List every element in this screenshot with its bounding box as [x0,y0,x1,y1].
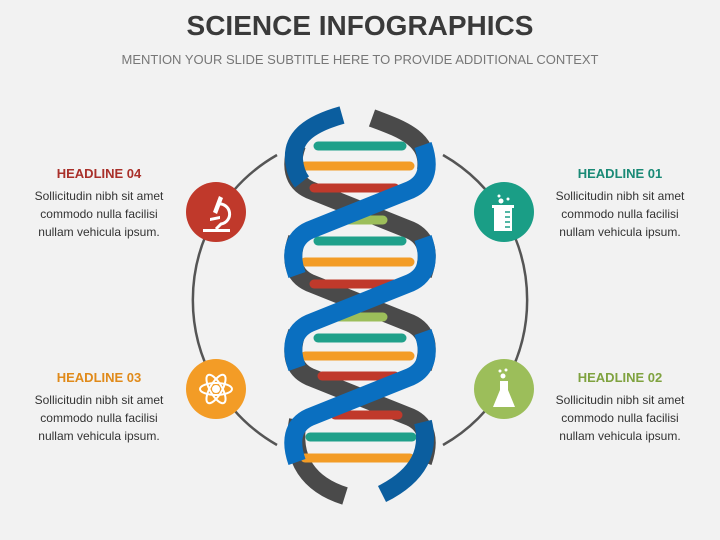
icon: atom [186,359,246,419]
icon: flask [474,359,534,419]
text: headline 01 [556,166,684,239]
text: headline 02: Sollicitudin nibh sit amet commodo nulla facilisi nullam vehicula ipsum. [556,393,684,443]
title: SCIENCE INFOGRAPHICS [187,10,533,41]
subtitle: MENTION YOUR SLIDE SUBTITLE HERE TO PROVIDE ADDITIONAL CONTEXT [122,52,598,67]
text: headline 03: Sollicitudin nibh sit amet commodo nulla facilisi nullam vehicula ipsum. [35,393,163,443]
text: headline 04 [35,166,164,239]
text: headline 03 [35,370,164,443]
dna: gray strand [293,118,427,496]
text: headline 03: HEADLINE 03 [57,370,141,385]
text: headline 02: HEADLINE 02 [578,370,662,385]
text: headline 01: HEADLINE 01 [578,166,662,181]
icon: beaker [474,182,534,242]
dna: rungs [305,146,412,458]
text: headline 02 [556,370,684,443]
dna: blue strand [293,115,427,494]
text: headline 04: HEADLINE 04 [57,166,141,181]
icon: microscope [186,182,246,242]
text: headline 01: Sollicitudin nibh sit amet commodo nulla facilisi nullam vehicula ipsum. [556,189,684,239]
text: headline 04: Sollicitudin nibh sit amet commodo nulla facilisi nullam vehicula ipsum. [35,189,163,239]
circle arcs [193,155,527,445]
